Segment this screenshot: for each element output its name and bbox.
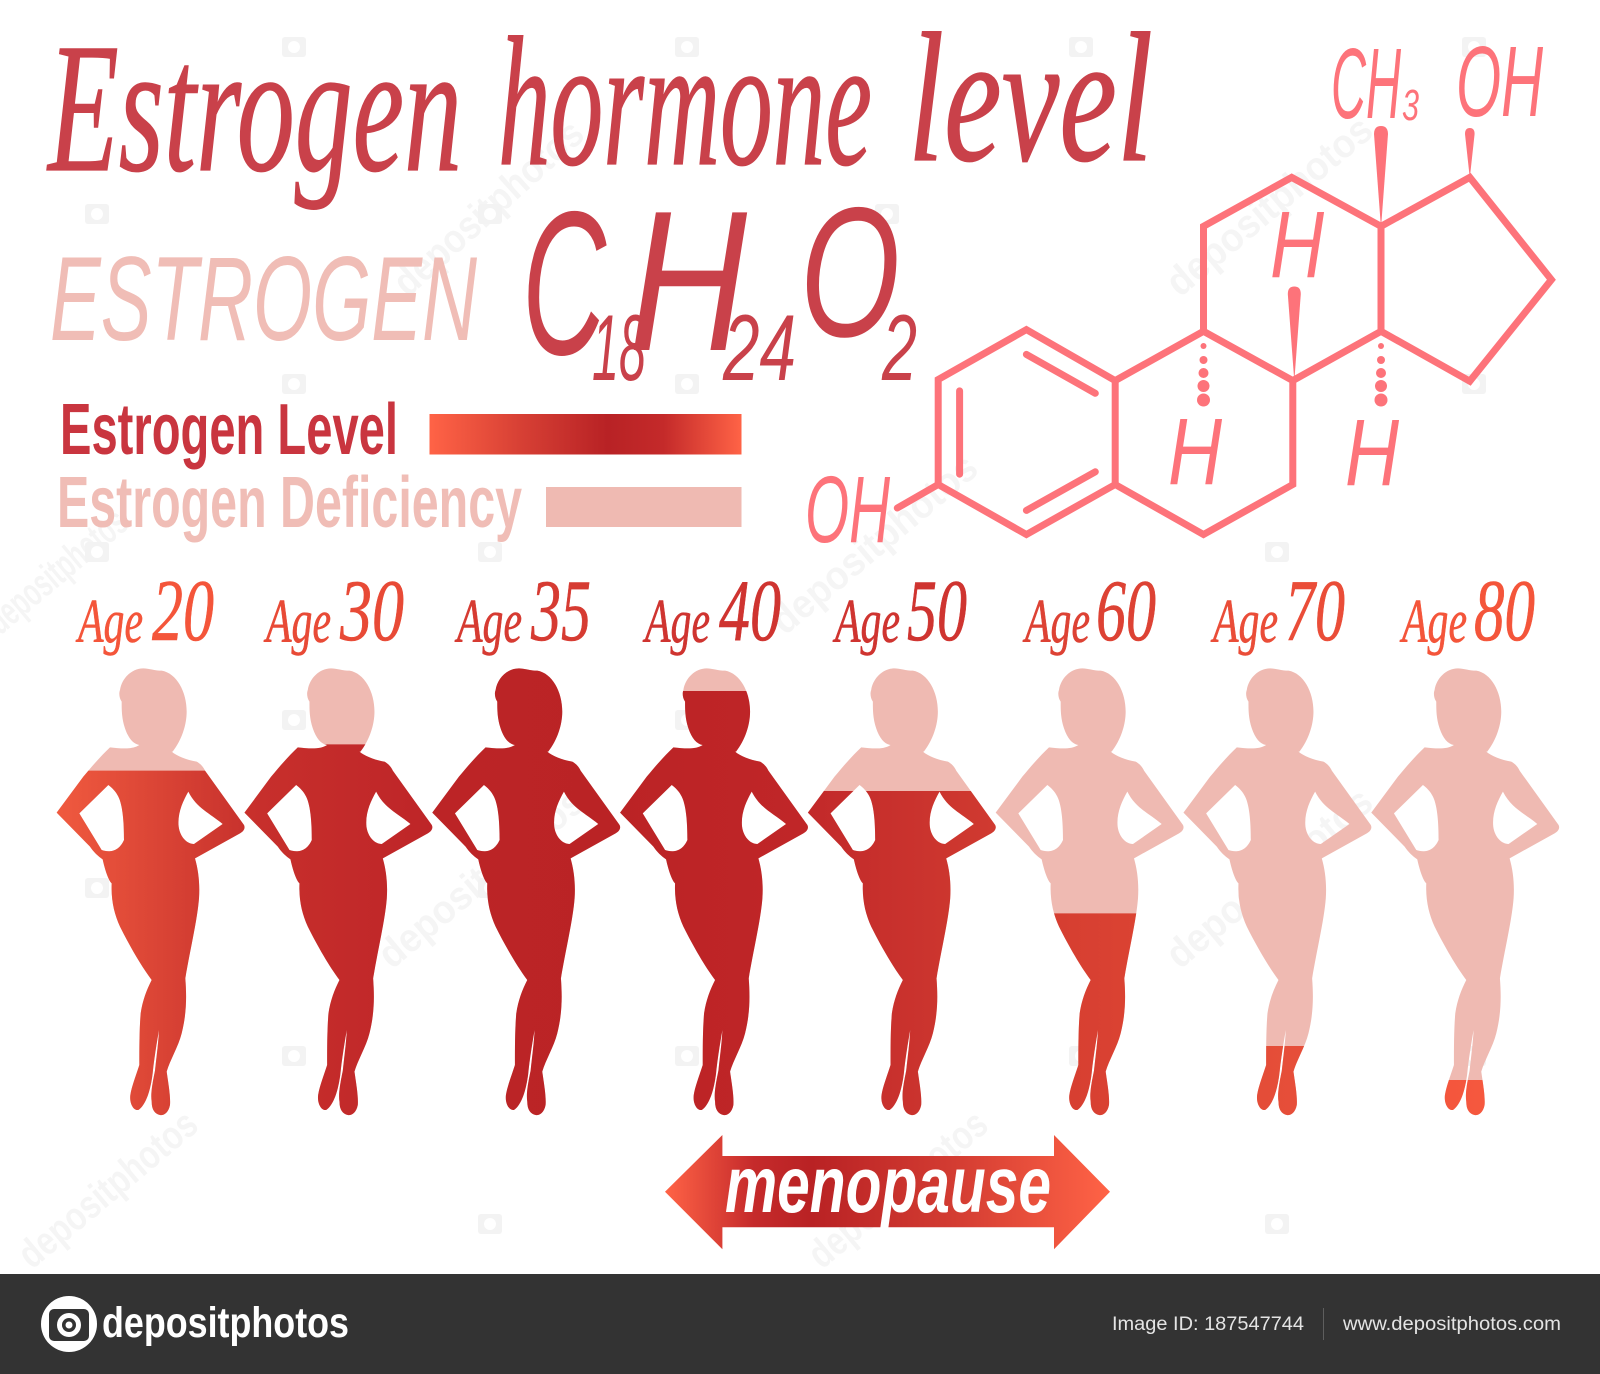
figure: age 20 xyxy=(57,563,245,1115)
subtitle: estrogen: ESTROGEN xyxy=(50,232,477,366)
age label: 80 xyxy=(1474,563,1535,660)
age label: Age xyxy=(454,588,522,656)
age label: Age xyxy=(263,588,331,656)
watermark pattern: depositphotos xyxy=(763,445,986,643)
age label xyxy=(642,563,781,660)
age label xyxy=(1210,563,1345,660)
atom labels: H xyxy=(1345,400,1399,506)
silhouette 20 xyxy=(57,668,245,1115)
title: hormone xyxy=(498,0,872,205)
double arrow shape xyxy=(665,1135,1110,1249)
age label: Age xyxy=(75,588,143,656)
age label: Age xyxy=(1022,588,1090,656)
watermark pattern: depositphotos xyxy=(1158,779,1381,977)
watermark pattern: depositphotos xyxy=(370,779,593,977)
molecule: estradiol structure xyxy=(805,26,1551,563)
chemical formula: 24 xyxy=(722,295,796,400)
age label: 50 xyxy=(907,563,967,660)
silhouette 40 xyxy=(620,668,808,1115)
age label xyxy=(454,563,591,660)
age label: 40 xyxy=(719,563,781,660)
age label: 60 xyxy=(1096,563,1156,660)
chemical formula: 2 xyxy=(881,295,917,400)
title: level xyxy=(908,0,1153,201)
legend: estrogen deficiency xyxy=(57,463,742,543)
silhouette 80 xyxy=(1371,668,1559,1115)
logo wordmark: depositphotos xyxy=(102,1299,349,1347)
silhouette 30 xyxy=(244,668,432,1115)
watermark pattern: depositphotos xyxy=(1158,107,1381,305)
deficiency label: Estrogen Deficiency xyxy=(57,463,522,543)
age label: 35 xyxy=(530,563,591,660)
atom labels: OH xyxy=(805,457,890,563)
atom labels: H xyxy=(1270,192,1324,298)
title xyxy=(46,0,1153,211)
logo icon xyxy=(41,1296,97,1352)
silhouette 50 xyxy=(808,668,996,1115)
chemical formula xyxy=(522,169,917,400)
age label: 30 xyxy=(339,563,404,660)
atom labels: 3 xyxy=(1402,81,1419,130)
age label: 70 xyxy=(1285,563,1345,660)
arrow: menopause xyxy=(665,1135,1110,1249)
figure: age 40 xyxy=(620,563,808,1115)
chemical formula: O xyxy=(800,170,900,376)
hashed bonds xyxy=(1197,343,1388,406)
skeleton bonds xyxy=(897,177,1551,534)
silhouette 70 xyxy=(1183,668,1371,1115)
image id: Image ID: 187547744 xyxy=(1112,1314,1304,1335)
atom labels: CH xyxy=(1331,28,1401,140)
age label: 20 xyxy=(152,563,214,660)
chemical formula: C xyxy=(522,169,607,398)
chemical formula: 18 xyxy=(592,295,646,400)
age label xyxy=(263,563,404,660)
watermark pattern: depositphotos xyxy=(385,111,592,305)
age label xyxy=(75,563,214,660)
age label xyxy=(832,563,967,660)
legend: estrogen level xyxy=(60,390,742,470)
website url: www.depositphotos.com xyxy=(1342,1314,1561,1335)
age label xyxy=(1022,563,1156,660)
footer bar xyxy=(0,1274,1600,1374)
figure: age 60 xyxy=(996,563,1184,1115)
watermark pattern: depositphotos xyxy=(800,1102,996,1277)
wedge bonds xyxy=(1288,126,1475,381)
atom labels: H xyxy=(1168,399,1222,505)
age label: Age xyxy=(1210,588,1278,656)
figure: age 50 xyxy=(808,563,996,1115)
legend label: Estrogen Level xyxy=(60,390,398,470)
silhouette 35 xyxy=(432,668,620,1115)
age label: Age xyxy=(1399,588,1467,656)
figure: age 70 xyxy=(1183,563,1371,1115)
figure: age 30 xyxy=(244,563,432,1115)
title: Estrogen xyxy=(46,6,462,211)
figure: age 35 xyxy=(432,563,620,1115)
age label: Age xyxy=(832,588,900,656)
age label: Age xyxy=(642,588,710,656)
silhouette 60 xyxy=(996,668,1184,1115)
legend swatch gradient xyxy=(430,414,742,454)
deficiency swatch xyxy=(546,487,742,527)
watermark pattern: depositphotos xyxy=(10,1102,206,1277)
age label xyxy=(1399,563,1535,660)
chemical formula: H xyxy=(629,170,747,393)
arrow label: menopause xyxy=(725,1140,1051,1229)
atom labels xyxy=(805,26,1543,563)
figure: age 80 xyxy=(1371,563,1559,1115)
